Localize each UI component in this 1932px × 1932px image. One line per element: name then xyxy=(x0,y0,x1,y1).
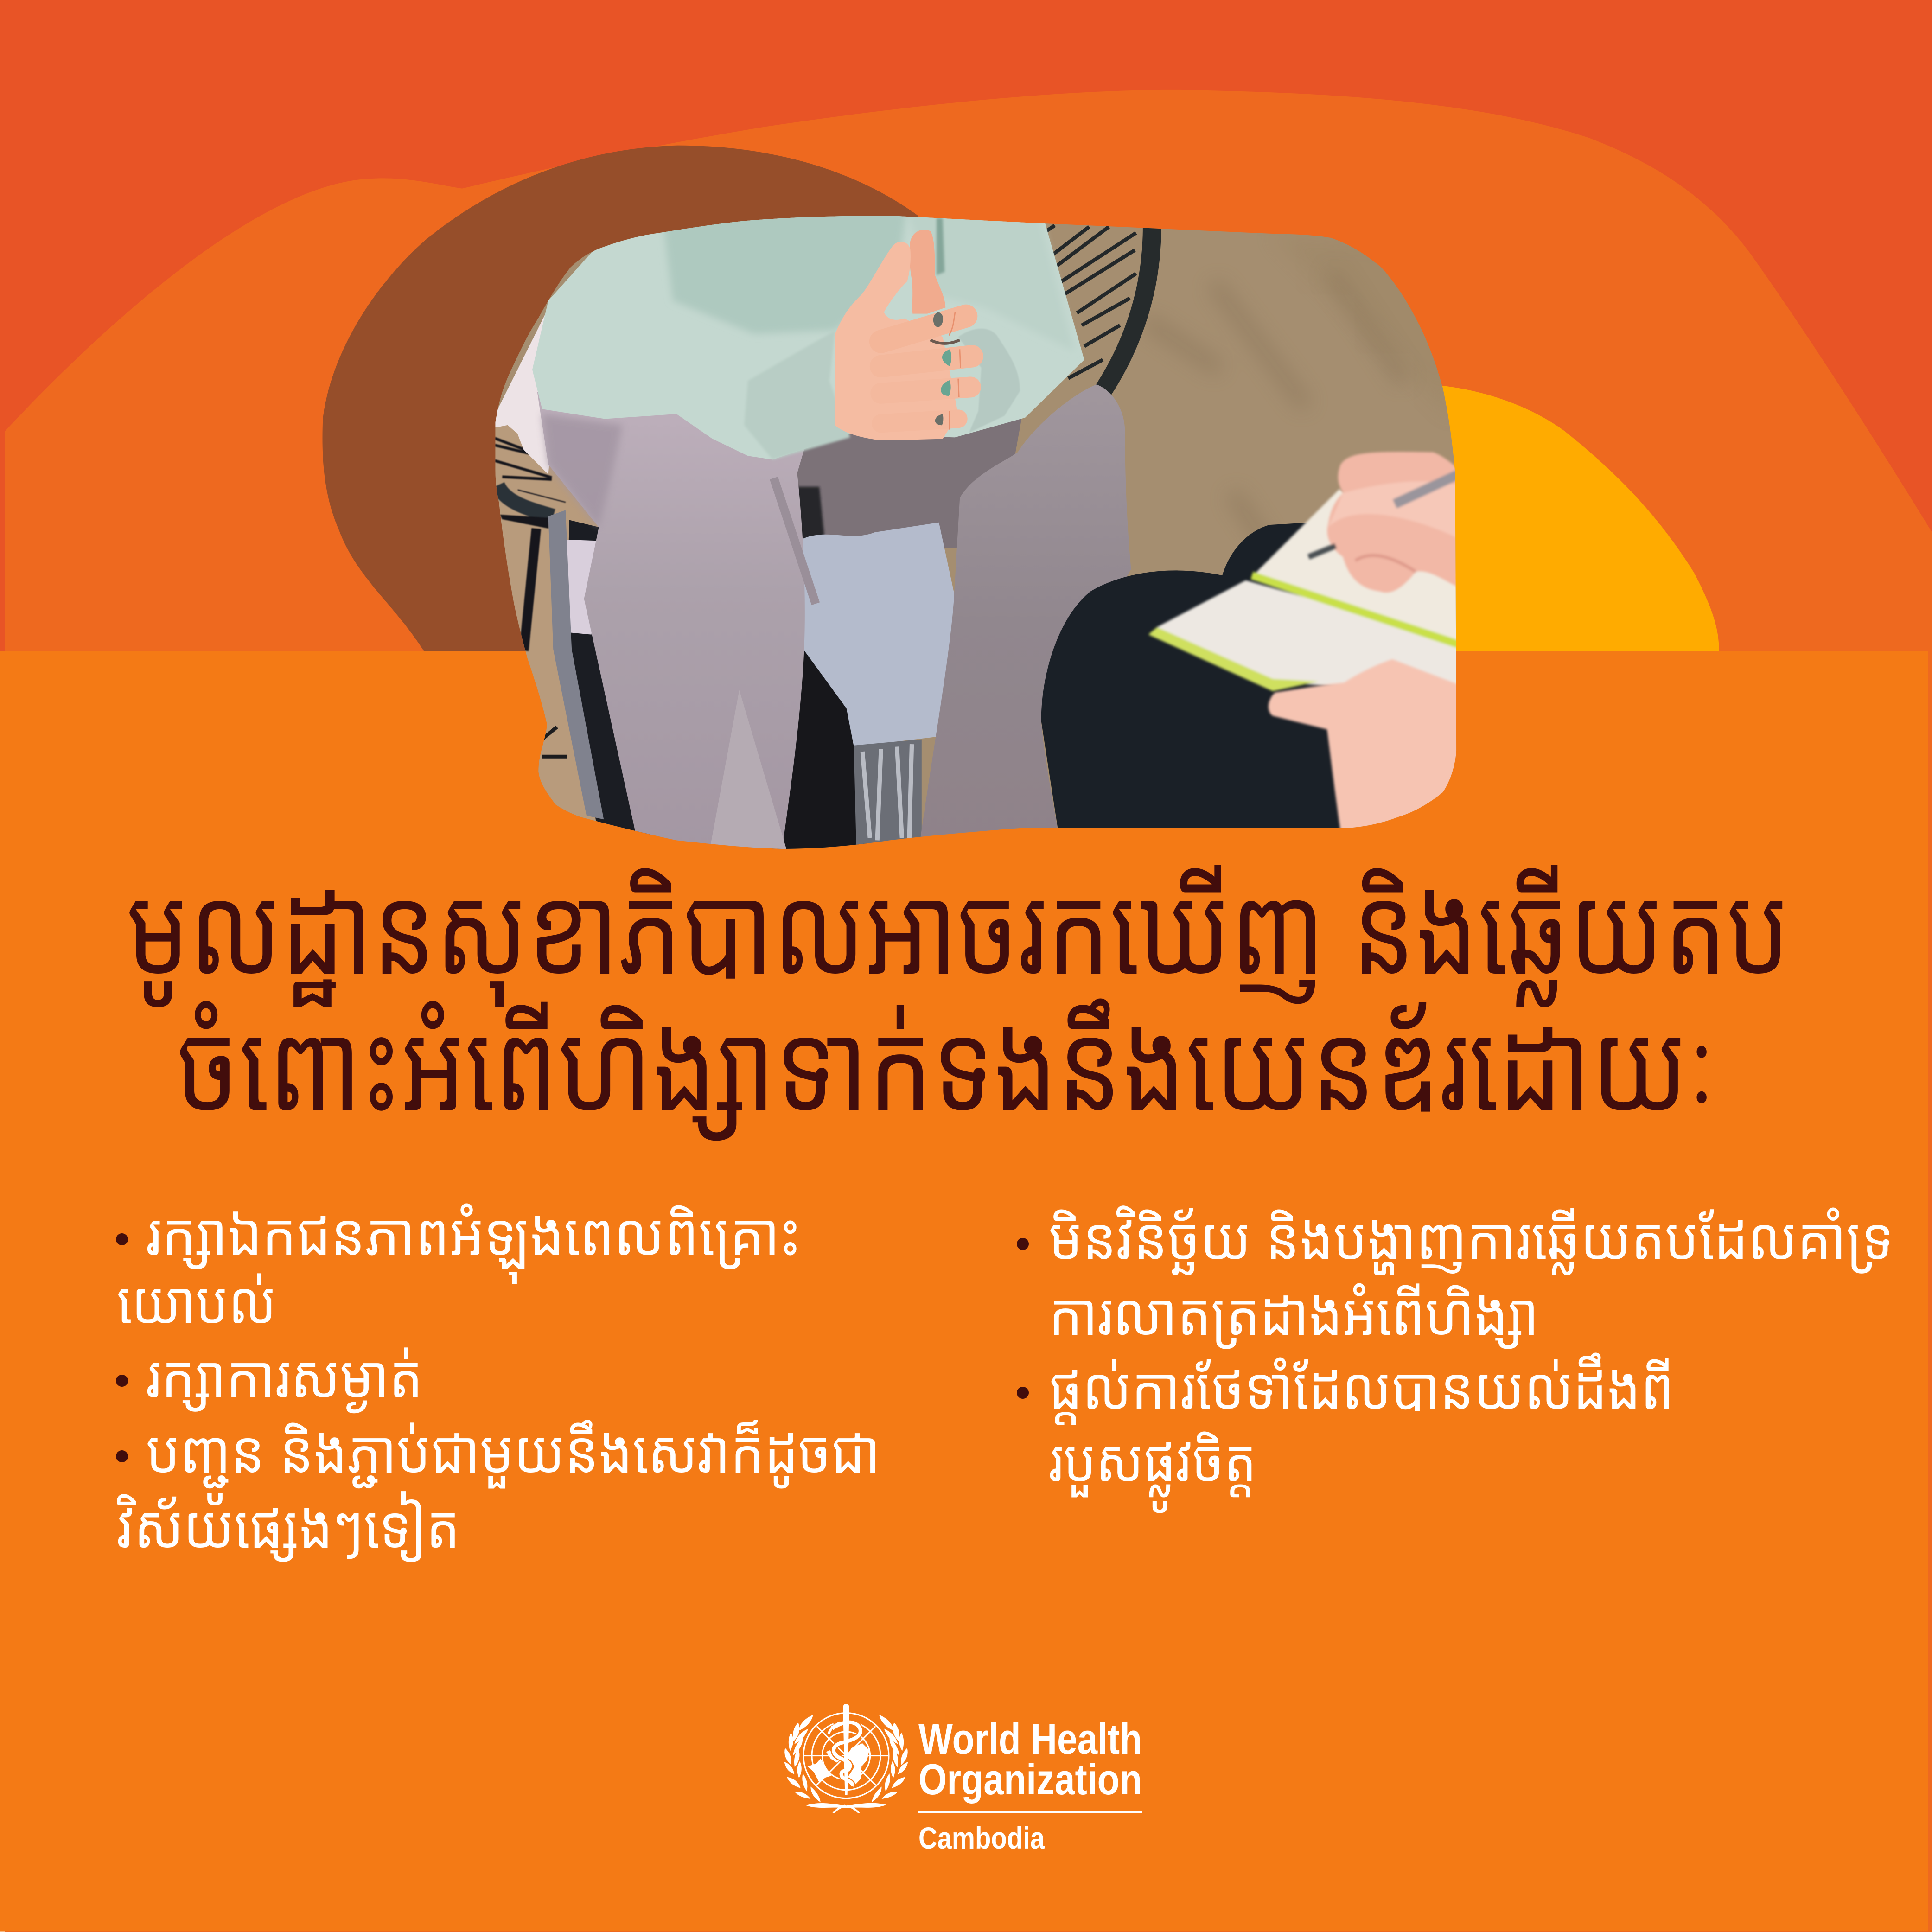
left bullet list xyxy=(116,1202,880,1562)
icon: WHO emblem xyxy=(784,1704,908,1813)
bullet 1 line 1: រក្សាឯកជនភាពអំឡុងពេលពិគ្រោះ xyxy=(146,1202,801,1284)
photo: chair back right xyxy=(1036,222,1152,402)
photo: writing hand and pen xyxy=(1308,452,1466,593)
background: red top band xyxy=(0,0,1932,654)
photo: right trouser leg xyxy=(918,384,1131,856)
right bullet list xyxy=(1017,1205,1894,1513)
photo: sweatshirt xyxy=(532,210,1084,459)
emblem continents xyxy=(808,1743,869,1787)
logo text: World Health: World Health xyxy=(918,1715,1142,1763)
title xyxy=(127,861,1790,1141)
photo: grey throw blanket xyxy=(801,523,956,850)
photo: blanket on chair xyxy=(548,510,653,850)
photo: trousers crotch shadow xyxy=(770,413,1023,548)
photo: black seat xyxy=(764,628,869,856)
photo: notebook xyxy=(1148,489,1466,696)
logo text: Cambodia: Cambodia xyxy=(918,1821,1045,1855)
bullet 5 line 2: របួសផ្លូវចិត្ត xyxy=(1049,1428,1256,1513)
photo: dark trousers of the writer xyxy=(1041,523,1368,856)
bullet 3 line 1: បញ្ជូន និងភ្ជាប់ជាមួយនឹងសេវាក៏ដូចជា xyxy=(146,1420,880,1505)
bullet 3 line 2: វិស័យផ្សេងៗទៀត xyxy=(116,1491,460,1562)
photo: counselling session xyxy=(487,210,1473,862)
background: yellow blob xyxy=(1429,384,1719,653)
photo: clasped hands xyxy=(835,218,1020,440)
photo: floor xyxy=(487,210,1473,862)
bullet dot 1 xyxy=(116,1233,128,1245)
bullet dot 3 xyxy=(116,1450,128,1462)
WHO logo xyxy=(784,1704,1142,1855)
photo: lower left floor chair feet xyxy=(542,727,567,757)
lower orange panel xyxy=(0,651,1928,1931)
bullet dot 4 xyxy=(1017,1238,1029,1250)
bullet 4 line 2: ការលាតត្រដាងអំពើហិង្សា xyxy=(1049,1282,1539,1349)
emblem wreath xyxy=(784,1715,908,1813)
bullet dot 5 xyxy=(1017,1387,1029,1399)
bullet 1 line 2: យោបល់ xyxy=(117,1270,276,1336)
emblem staff xyxy=(843,1704,849,1795)
bullet 5 line 1: ផ្តល់ការថែទាំដែលបានយល់ដឹងពី xyxy=(1049,1353,1674,1425)
bullet dot 2 xyxy=(116,1375,128,1387)
emblem serpent outline gap xyxy=(834,1722,861,1786)
emblem serpent xyxy=(829,1722,861,1786)
photo: left trouser leg xyxy=(537,392,816,856)
bullet 2: រក្សាការសម្ងាត់ xyxy=(146,1345,423,1413)
background: brown blob xyxy=(323,146,986,653)
photo: left chair xyxy=(495,438,566,650)
logo divider xyxy=(918,1811,1142,1813)
logo text: Organization: Organization xyxy=(918,1755,1142,1804)
photo: dark gap under crotch xyxy=(796,487,826,548)
emblem globe xyxy=(803,1713,889,1798)
photo: lower hand xyxy=(1269,659,1466,850)
photo: white fluffy throw xyxy=(495,314,549,474)
